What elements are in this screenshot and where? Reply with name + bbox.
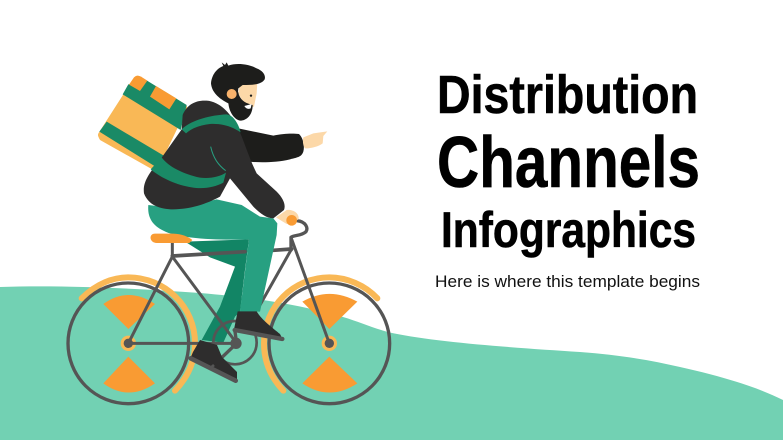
subtitle: Here is where this template begins <box>435 273 700 291</box>
backpack straps <box>151 114 241 188</box>
torso and near arm <box>144 101 285 218</box>
title line 1: Distribution <box>437 65 698 125</box>
delivery backpack <box>99 76 187 167</box>
title <box>437 65 700 258</box>
hand and grip <box>276 210 299 226</box>
title line 2: Channels <box>437 123 700 203</box>
shoes <box>191 311 282 381</box>
bicycle frame <box>128 221 329 365</box>
cyclist illustration <box>68 62 390 404</box>
far leg <box>185 239 249 343</box>
saddle <box>151 234 192 243</box>
fenders <box>82 277 377 391</box>
far arm <box>238 128 304 162</box>
front wheel <box>269 283 390 404</box>
bicycle and legs <box>68 199 390 404</box>
rear wheel <box>68 283 189 404</box>
background hill <box>0 286 783 440</box>
sleeve crease <box>211 147 226 171</box>
upper body <box>99 62 327 218</box>
head <box>211 62 265 121</box>
near leg <box>148 199 277 312</box>
pointing hand <box>303 131 327 148</box>
title line 3: Infographics <box>441 202 696 258</box>
